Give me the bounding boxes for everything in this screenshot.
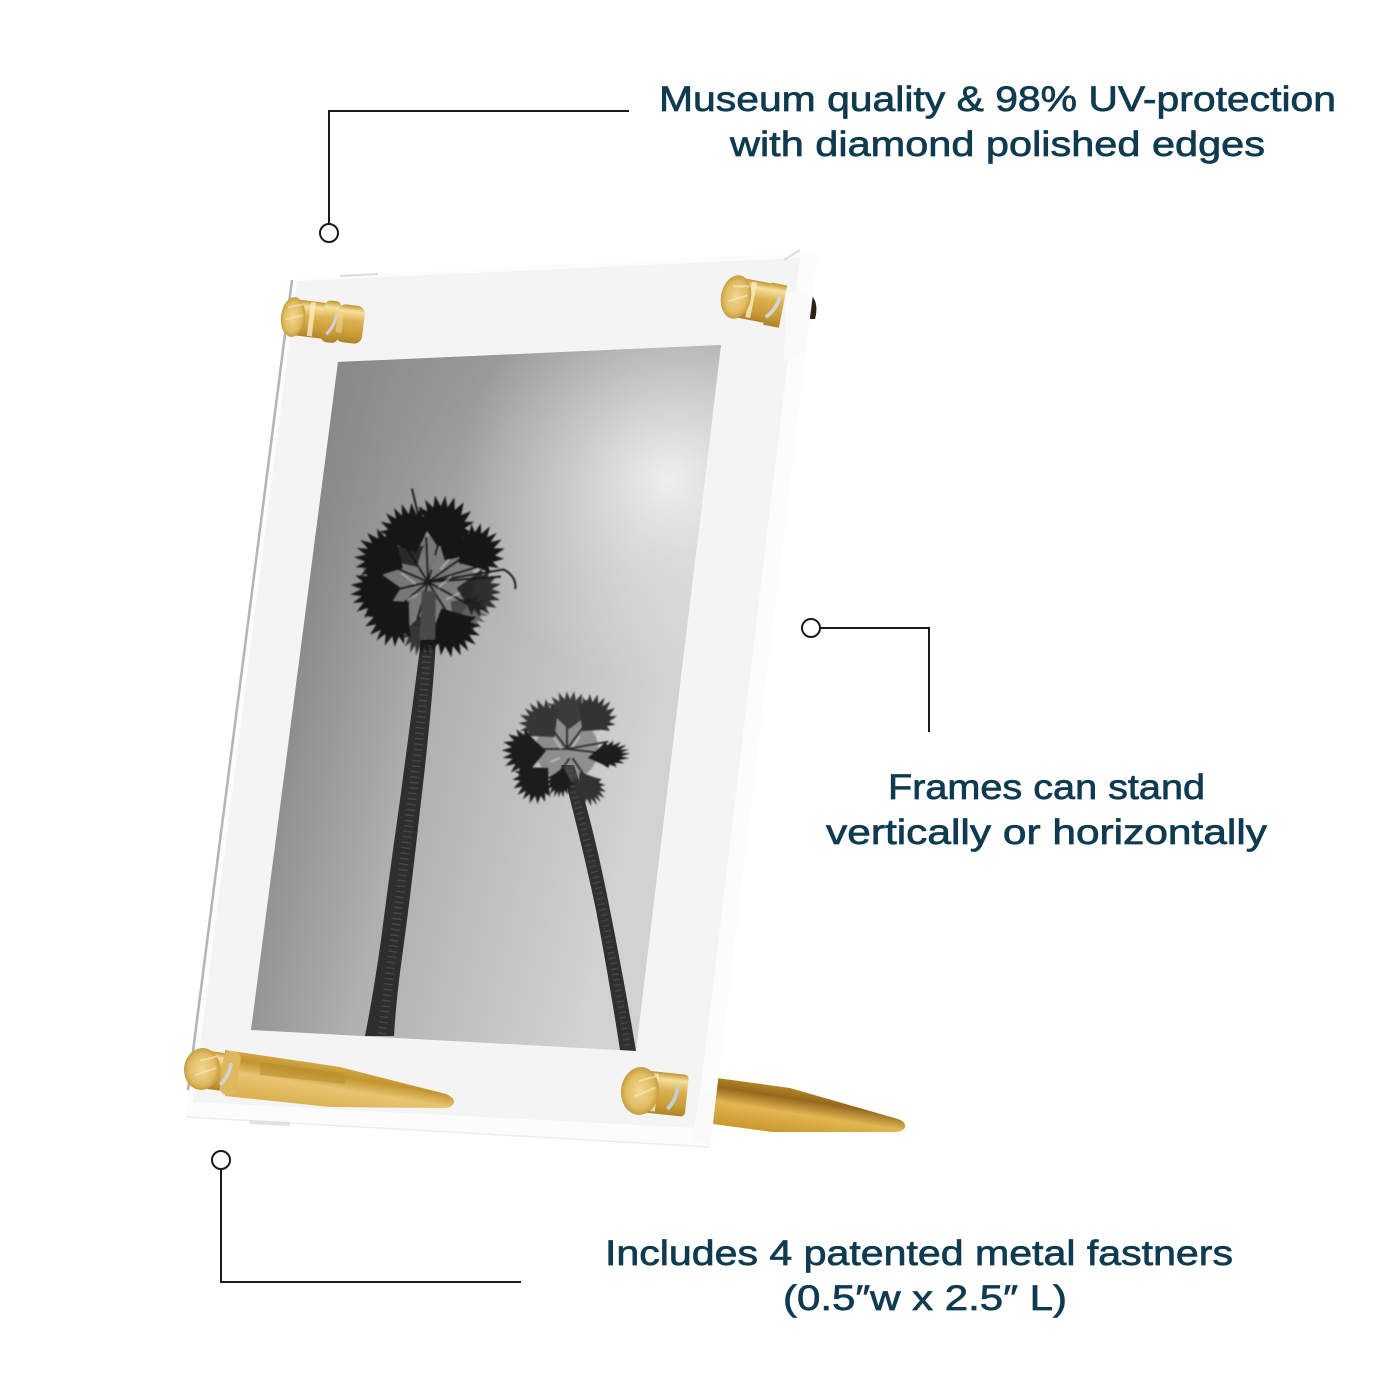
callout text: stand: vertically or horizontally [826, 813, 1268, 852]
frame face [193, 258, 800, 1128]
callout line: top [320, 111, 629, 242]
photo: palm trees [251, 345, 721, 1051]
callout text: fasteners: Includes 4 patented metal fastners [605, 1234, 1233, 1273]
short palm trunk [561, 765, 636, 1051]
short palm crown [501, 686, 632, 812]
spike fastener: bottom left [181, 1045, 454, 1108]
rear peg end [809, 296, 816, 319]
callout text: stand [826, 768, 1268, 852]
callout text: fasteners: (0.5″w x 2.5″ L) [783, 1279, 1067, 1318]
acrylic frame [185, 250, 818, 1147]
rear spike fastener [713, 1078, 905, 1132]
gold fastener: top left [279, 295, 366, 346]
tall palm crown [345, 489, 515, 666]
callout text: fasteners [605, 1234, 1233, 1318]
callout text: UV protection: with diamond polished edges [729, 125, 1265, 164]
callout line: bottom [212, 1151, 521, 1282]
callout text: UV protection [659, 80, 1336, 164]
gold fastener: bottom right [619, 1065, 689, 1120]
frame clear peg block [784, 290, 811, 362]
tall palm trunk [365, 640, 436, 1036]
callout text: stand: Frames can stand [888, 768, 1205, 807]
callout line: right [802, 619, 929, 732]
callout text: UV protection: Museum quality & 98% UV-protection [659, 80, 1336, 119]
gold fastener: top right [717, 273, 787, 328]
